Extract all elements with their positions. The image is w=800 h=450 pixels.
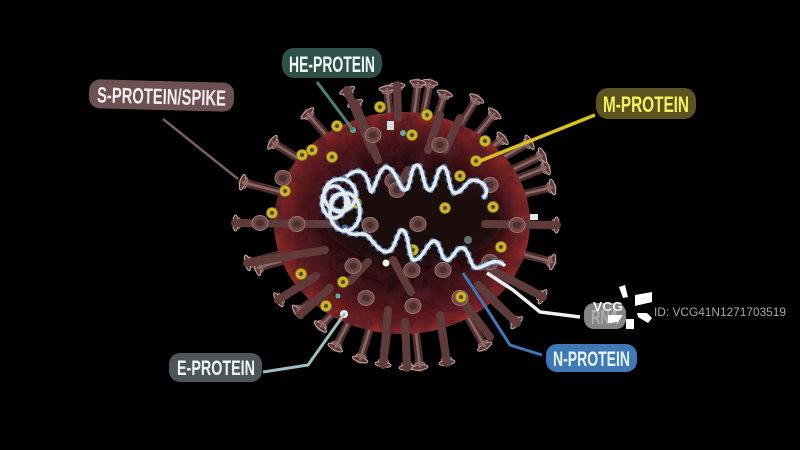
RNA helix with N-protein beads bbox=[322, 165, 505, 268]
watermark logo: VCG bbox=[593, 299, 623, 314]
front spikes and stalk bulbs bbox=[235, 85, 557, 368]
virus illustration bbox=[235, 82, 557, 368]
label: E-protein: E-PROTEIN bbox=[177, 357, 255, 380]
label: RNA bbox=[584, 303, 626, 329]
leader line: M-protein bbox=[480, 115, 595, 161]
label: S-protein/spike bbox=[89, 79, 234, 112]
watermark logo bbox=[593, 285, 652, 329]
virus spikes bbox=[235, 82, 557, 368]
leader line: RNA bbox=[487, 273, 580, 317]
leader line: HE-protein bbox=[317, 82, 353, 130]
label: E-protein bbox=[169, 353, 262, 382]
label: M-protein bbox=[596, 88, 696, 119]
label: M-protein: M-PROTEIN bbox=[603, 92, 689, 117]
label: N-protein bbox=[546, 344, 637, 372]
HE and E protein particles bbox=[336, 121, 538, 318]
M-protein markers bbox=[266, 102, 506, 312]
virus body bbox=[274, 112, 530, 334]
label: HE-protein: HE-PROTEIN bbox=[289, 52, 375, 77]
watermark image ID: ID: VCG41N1271703519 bbox=[654, 307, 786, 319]
leader line: S-protein bbox=[163, 119, 238, 179]
label: RNA: RNA bbox=[591, 307, 619, 329]
leader line: E-protein bbox=[263, 313, 345, 372]
label: HE-protein bbox=[282, 48, 382, 78]
label: S-protein/spike: S-PROTEIN/SPIKE bbox=[97, 82, 226, 111]
leader line: N-protein bbox=[463, 273, 542, 355]
label: N-protein: N-PROTEIN bbox=[553, 348, 630, 371]
